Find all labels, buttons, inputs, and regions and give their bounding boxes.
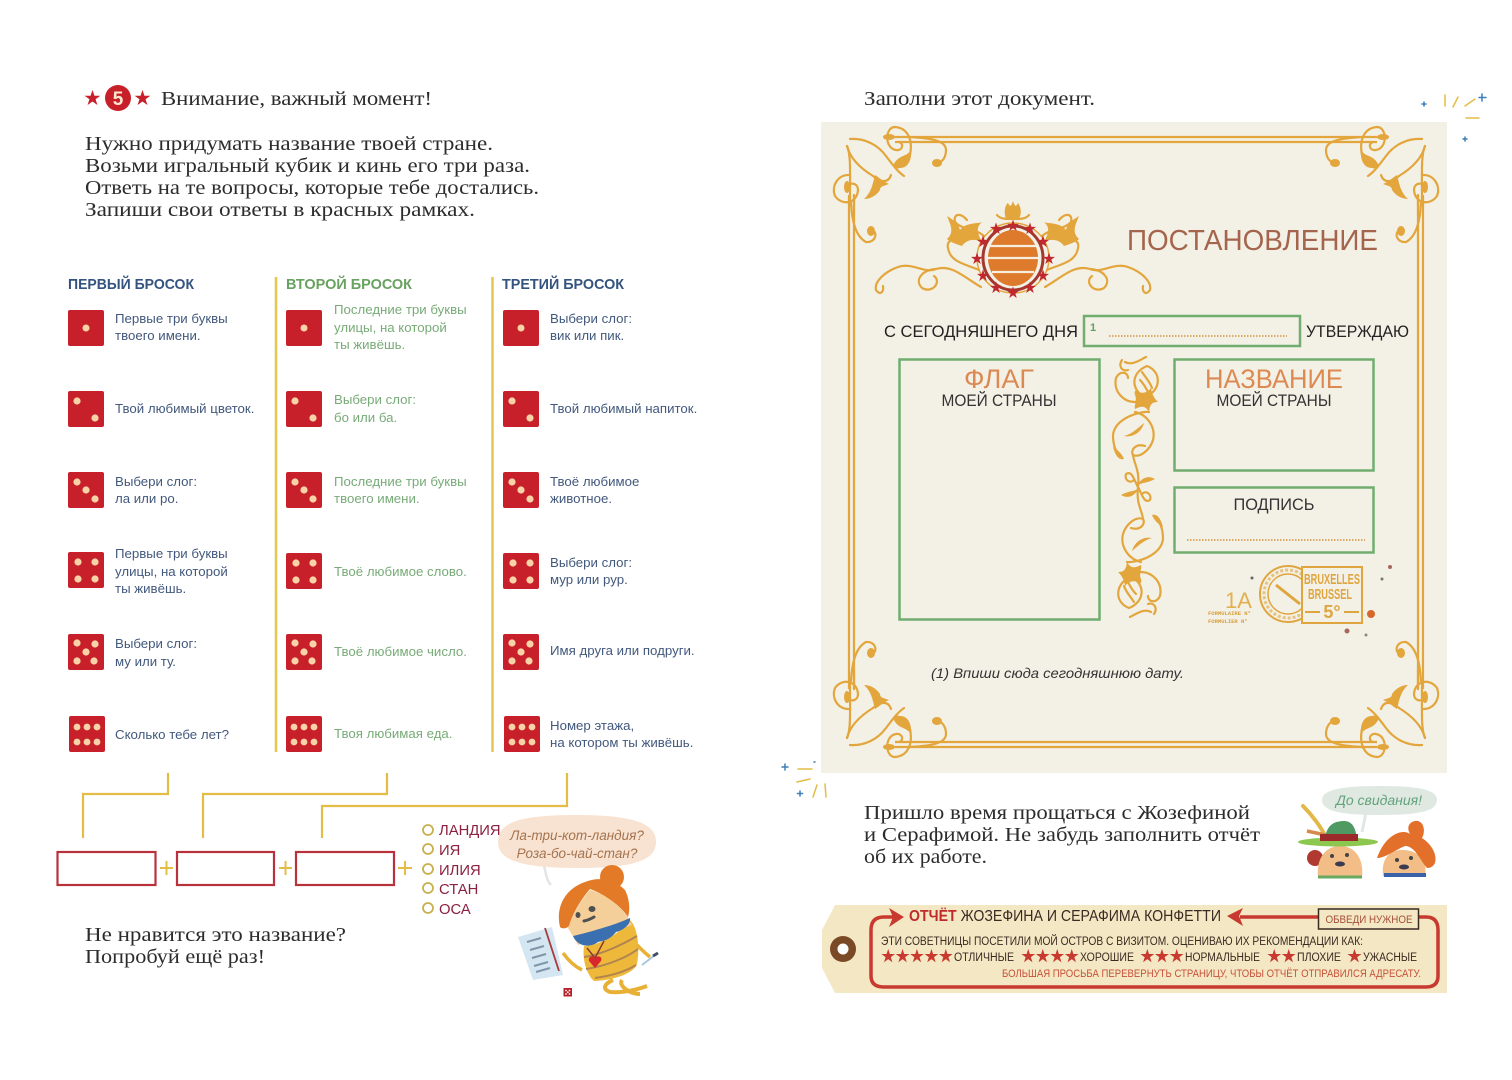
flag box: ФЛАГ xyxy=(964,364,1034,394)
rating scale xyxy=(881,948,1417,965)
rating scale: ★★ xyxy=(1267,948,1296,965)
options text: вик или пик. xyxy=(550,328,624,343)
postage stamp: FORMULAIRE N° xyxy=(1208,610,1251,617)
icon: stars and number 5: 5 xyxy=(113,89,124,110)
options text: ты живёшь. xyxy=(115,581,186,596)
options text: Твой любимый цветок. xyxy=(115,401,254,416)
connector lines xyxy=(83,773,567,838)
suffix options: ЛАНДИЯ xyxy=(439,823,501,839)
country name box xyxy=(1174,360,1374,470)
options text: Выбери слог: xyxy=(334,392,416,407)
panel: second throw xyxy=(286,275,467,752)
options text: Выбери слог: xyxy=(115,474,197,489)
try again text: Попробуй ещё раз! xyxy=(85,946,265,968)
intro text block: Запиши свои ответы в красных рамках. xyxy=(85,199,475,221)
options text: Последние три буквы xyxy=(334,302,467,317)
characters: two advisers xyxy=(1298,806,1436,877)
options text: твоего имени. xyxy=(334,491,420,506)
instruction: fill in the document: Заполни этот документ. xyxy=(864,88,1095,110)
emblem xyxy=(876,201,1150,300)
sparkle decoration top xyxy=(1422,94,1486,141)
suffix options xyxy=(423,823,501,918)
options text: Сколько тебе лет? xyxy=(115,727,229,742)
intro text block: Ответь на те вопросы, которые тебе достались. xyxy=(85,177,539,199)
rating scale: ПЛОХИЕ xyxy=(1297,952,1341,964)
icon: stars and number 5 xyxy=(84,85,151,111)
options text: твоего имени. xyxy=(115,328,201,343)
emblem: ★ xyxy=(1042,251,1056,266)
icon: stars and number 5: ★ xyxy=(134,89,151,108)
signature box xyxy=(1174,488,1374,552)
options text: Твой любимый напиток. xyxy=(550,401,697,416)
options text: ты живёшь. xyxy=(334,337,405,352)
intro text block: Нужно придумать название твоей стране. xyxy=(85,133,493,155)
intro text block: Возьми игральный кубик и кинь его три раза. xyxy=(85,155,530,177)
emblem: ★ xyxy=(1036,234,1050,249)
try again text: Не нравится это название? xyxy=(85,924,346,946)
options text: му или ту. xyxy=(115,654,176,669)
report title: ОТЧЁТ ЖОЗЕФИНА И СЕРАФИМА КОНФЕТТИ xyxy=(909,908,1221,925)
farewell text: Пришло время прощаться с Жозефиной xyxy=(864,802,1250,824)
postage stamp: 1A xyxy=(1225,588,1252,613)
options text: на котором ты живёшь. xyxy=(550,735,693,750)
rating scale: ★★★★★ xyxy=(881,948,953,965)
speech bubble: Роза-бо-чай-стан? xyxy=(517,846,638,861)
options text: Твоё любимое число. xyxy=(334,644,467,659)
rating scale: ★★★ xyxy=(1140,948,1184,965)
emblem: ★ xyxy=(976,234,990,249)
emblem: ★ xyxy=(1006,285,1020,300)
circle what is needed xyxy=(1318,909,1418,929)
rating scale: ОТЛИЧНЫЕ xyxy=(954,952,1014,964)
footnote: (1) Впиши сюда сегодняшнюю дату. xyxy=(931,665,1184,681)
suffix options: СТАН xyxy=(439,882,478,898)
name boxes xyxy=(58,852,412,885)
emblem: ★ xyxy=(989,280,1003,295)
heading: third throw: ТРЕТИЙ БРОСОК xyxy=(502,275,625,293)
panel: third throw xyxy=(502,275,697,752)
postage stamp xyxy=(1208,565,1392,636)
character: girl with document xyxy=(518,865,658,994)
country name box: НАЗВАНИЕ xyxy=(1205,364,1343,394)
center ornament xyxy=(1113,357,1163,617)
emblem: ★ xyxy=(1023,221,1037,236)
postage stamp: BRUXELLES xyxy=(1304,571,1360,588)
emblem: ★ xyxy=(976,268,990,283)
options text: Выбери слог: xyxy=(550,555,632,570)
signature box: ПОДПИСЬ xyxy=(1234,496,1314,514)
circle what is needed: ОБВЕДИ НУЖНОЕ xyxy=(1326,914,1412,926)
flag box xyxy=(900,360,1100,620)
report luggage tag xyxy=(822,905,1447,993)
date line xyxy=(884,316,1409,346)
panel: first throw xyxy=(68,275,254,752)
options text: мур или рур. xyxy=(550,572,628,587)
options text: животное. xyxy=(550,491,612,506)
options text: Твоё любимое слово. xyxy=(334,564,467,579)
options text: Первые три буквы xyxy=(115,546,228,561)
heading: first throw: ПЕРВЫЙ БРОСОК xyxy=(68,275,195,293)
emblem: ★ xyxy=(970,251,984,266)
options text: Номер этажа, xyxy=(550,718,634,733)
date line: УТВЕРЖДАЮ xyxy=(1306,323,1409,341)
heading: important moment xyxy=(84,85,432,111)
icon: small dice xyxy=(564,988,572,996)
farewell text: и Серафимой. Не забудь заполнить отчёт xyxy=(864,824,1260,846)
panel: decree document xyxy=(821,122,1447,773)
rating scale: НОРМАЛЬНЫЕ xyxy=(1185,952,1260,964)
corner ornaments xyxy=(834,127,1438,757)
speech bubble: goodbye xyxy=(1322,786,1437,832)
farewell text: об их работе. xyxy=(864,846,987,868)
options text: Выбери слог: xyxy=(550,311,632,326)
options text: бо или ба. xyxy=(334,410,397,425)
report body: ЭТИ СОВЕТНИЦЫ ПОСЕТИЛИ МОЙ ОСТРОВ С ВИЗИТОМ. ОЦЕНИВАЮ ИХ РЕКОМЕНДАЦИИ КАК: xyxy=(881,935,1363,948)
options text: Твоё любимое xyxy=(550,474,639,489)
postage stamp: BRUSSEL xyxy=(1308,586,1352,603)
options text: Имя друга или подруги. xyxy=(550,643,695,658)
suffix options: ОСА xyxy=(439,902,471,918)
report note: БОЛЬШАЯ ПРОСЬБА ПЕРЕВЕРНУТЬ СТРАНИЦУ, ЧТОБЫ ОТЧЁТ ОТПРАВИЛСЯ АДРЕСАТУ. xyxy=(1002,968,1421,980)
title: decree: ПОСТАНОВЛЕНИЕ xyxy=(1127,225,1378,257)
hole ring xyxy=(830,936,856,962)
speech bubble: goodbye: До свидания! xyxy=(1334,792,1422,808)
sparkle decoration bottom xyxy=(782,762,826,797)
emblem: ★ xyxy=(1036,268,1050,283)
suffix options: ИЯ xyxy=(439,843,460,859)
heading: second throw: ВТОРОЙ БРОСОК xyxy=(286,275,413,293)
icon: stars and number 5: ★ xyxy=(84,89,101,108)
speech bubble xyxy=(498,815,656,885)
options text: Выбери слог: xyxy=(115,636,197,651)
options text: улицы, на которой xyxy=(334,320,447,335)
rating scale: ХОРОШИЕ xyxy=(1080,952,1134,964)
postage stamp: 5° xyxy=(1323,602,1341,622)
options text: ла или ро. xyxy=(115,491,178,506)
rating scale: УЖАСНЫЕ xyxy=(1363,952,1417,964)
heading text: Внимание, важный момент! xyxy=(161,88,432,110)
emblem: ★ xyxy=(1006,218,1020,233)
country name box: МОЕЙ СТРАНЫ xyxy=(1216,391,1332,410)
options text: Последние три буквы xyxy=(334,474,467,489)
rating scale: ★★★★ xyxy=(1021,948,1079,965)
options text: Твоя любимая еда. xyxy=(334,726,452,741)
postage stamp: FORMULIER N° xyxy=(1208,618,1248,625)
date line: С СЕГОДНЯШНЕГО ДНЯ xyxy=(884,323,1078,341)
suffix options: ИЛИЯ xyxy=(439,863,481,879)
date line: 1 xyxy=(1090,322,1096,334)
emblem: ★ xyxy=(1023,280,1037,295)
rating scale: ★ xyxy=(1347,948,1362,965)
emblem: ★ xyxy=(989,221,1003,236)
speech bubble: Ла-три-кот-ландия? xyxy=(509,828,644,843)
options text: улицы, на которой xyxy=(115,564,228,579)
options text: Первые три буквы xyxy=(115,311,228,326)
flag box: МОЕЙ СТРАНЫ xyxy=(942,391,1056,410)
